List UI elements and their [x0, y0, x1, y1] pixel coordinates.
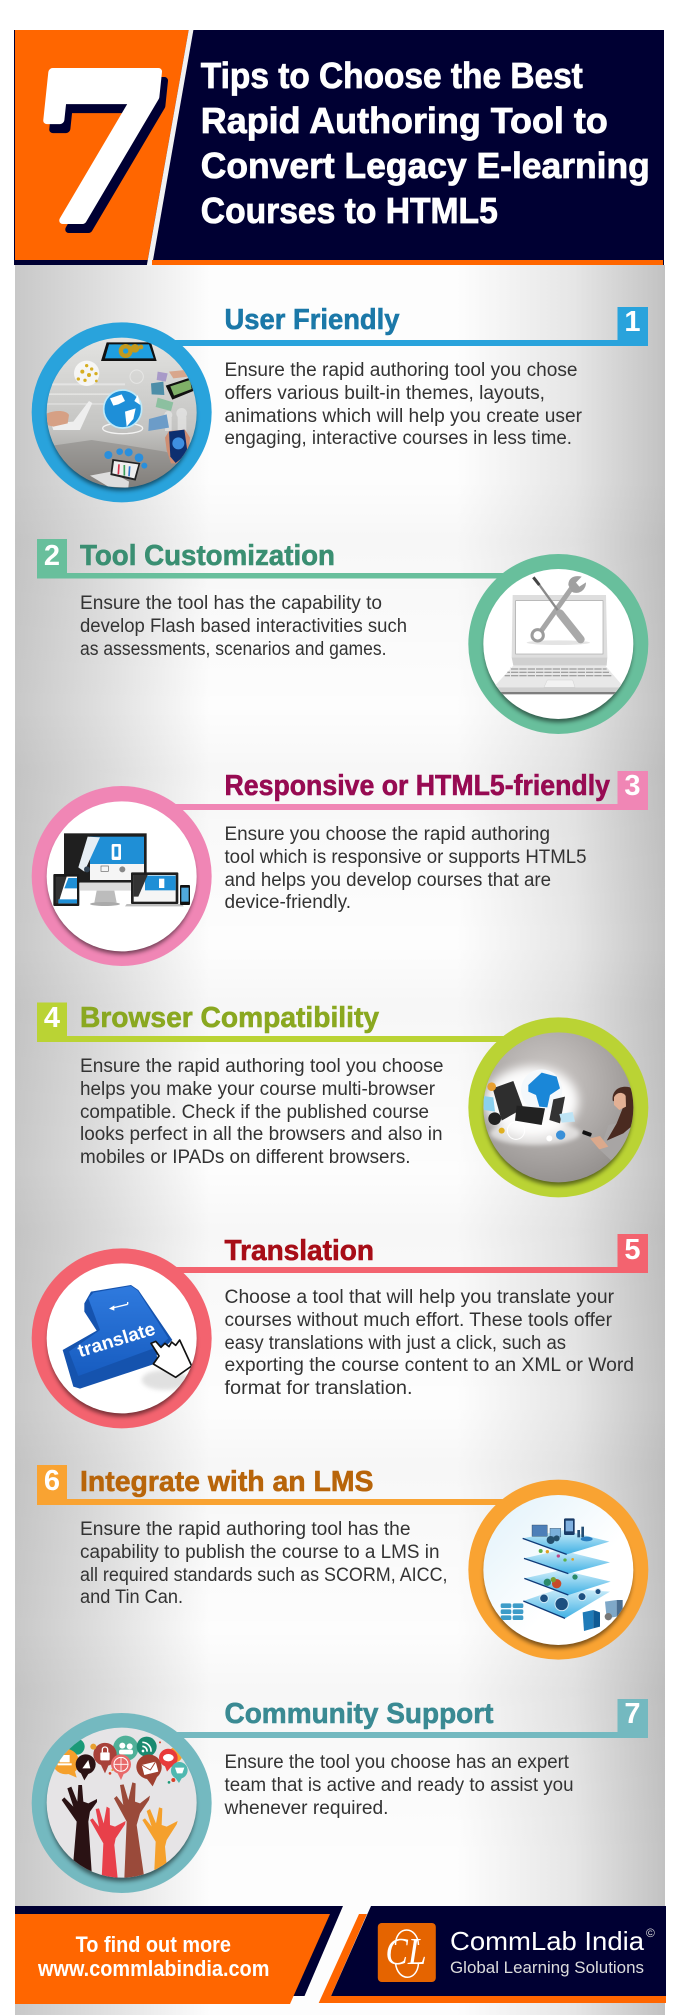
connector bar and number box [175, 1699, 648, 1738]
connector bar and number box [175, 307, 648, 346]
number 1: 1 [624, 306, 641, 338]
icon: translate key: translate [75, 1318, 158, 1361]
body text: device-friendly. [224, 892, 351, 913]
body text: tool which is responsive or supports HTML5 [224, 847, 586, 868]
body text: mobiles or IPADs on different browsers. [80, 1147, 410, 1168]
body text: and helps you develop courses that are [224, 870, 551, 891]
heading: Community Support [224, 1698, 494, 1730]
body text: looks perfect in all the browsers and also in [80, 1124, 442, 1145]
body text: Ensure the rapid authoring tool has the [80, 1519, 410, 1540]
footer call to action panel [15, 1914, 330, 2004]
footer [15, 1906, 666, 2004]
white slash [147, 30, 193, 266]
body text: whenever required. [223, 1798, 388, 1819]
body text [223, 1752, 573, 1819]
connector bar and number box [175, 771, 648, 810]
tagline: Global Learning Solutions [450, 1958, 644, 1977]
big number seven: 7 [22, 40, 185, 278]
connector bar and number box [37, 539, 510, 578]
number 7: 7 [624, 1698, 641, 1730]
body text: Ensure the rapid authoring tool you choose [80, 1056, 444, 1077]
footer call to action panel: www.commlabindia.com [37, 1956, 269, 1981]
number 5: 5 [624, 1234, 641, 1266]
body text: capability to publish the course to a LMS in [80, 1542, 440, 1563]
body text [80, 593, 407, 660]
body text: and Tin Can. [80, 1587, 183, 1608]
number 4: 4 [44, 1002, 60, 1034]
number 6: 6 [44, 1465, 60, 1497]
title: Tips to Choose the Best [201, 55, 583, 96]
body text: offers various built-in themes, layouts, [224, 383, 545, 404]
copyright mark: © [646, 1926, 655, 1940]
body text: easy translations with just a click, such as [224, 1333, 566, 1354]
icon: raised hands and speech bubbles [32, 1713, 212, 1893]
heading: Tool Customization [80, 540, 335, 572]
title: Rapid Authoring Tool to [201, 100, 608, 141]
title: Courses to HTML5 [201, 190, 498, 231]
body text [224, 360, 583, 449]
heading: Responsive or HTML5-friendly [224, 770, 610, 802]
body text: compatible. Check if the published course [80, 1102, 429, 1123]
body text: Ensure the tool has the capability to [80, 593, 382, 614]
body text: team that is active and ready to assist you [224, 1775, 574, 1796]
number 3: 3 [624, 770, 641, 802]
panel: tip 2 tool customization [37, 539, 648, 734]
logo mark [378, 1923, 436, 1982]
heading: User Friendly [224, 304, 400, 336]
icon: laptop with tools [468, 554, 648, 734]
icon: digital world collage [32, 322, 212, 502]
brand name: CommLab India [450, 1926, 645, 1956]
footer brand panel [319, 1906, 666, 2003]
panel: tip 7 community support [32, 1698, 648, 1893]
panel: tip 1 user friendly [32, 304, 648, 502]
body text: develop Flash based interactivities such [80, 616, 407, 637]
body text: Ensure the rapid authoring tool you chose [224, 360, 578, 381]
body text [80, 1056, 444, 1168]
body text: Choose a tool that will help you translate your [224, 1287, 615, 1308]
body text [224, 1287, 634, 1399]
panel: tip 3 responsive [32, 770, 648, 966]
connector bar and number box [37, 1002, 510, 1042]
heading: Translation [224, 1235, 374, 1267]
logo mark: CL [386, 1931, 426, 1973]
footer call to action panel: To find out more [76, 1932, 231, 1957]
body text: helps you make your course multi-browser [80, 1079, 436, 1100]
panel: tip 5 translation [32, 1234, 648, 1428]
big number seven: 7 [16, 31, 179, 269]
icon: translate key [32, 1248, 212, 1428]
body text: as assessments, scenarios and games. [80, 639, 386, 660]
connector bar and number box [175, 1234, 648, 1273]
heading: Integrate with an LMS [80, 1466, 374, 1498]
connector bar and number box [37, 1465, 510, 1505]
panel: tip 6 integrate with LMS [37, 1465, 648, 1660]
icon: layered LMS diagram [468, 1480, 648, 1660]
body text: exporting the course content to an XML or Word [224, 1355, 634, 1376]
number 2: 2 [44, 540, 60, 572]
body text: Ensure you choose the rapid authoring [224, 824, 550, 845]
icon: responsive devices [32, 786, 212, 966]
orange number panel [15, 30, 189, 260]
body text: format for translation. [224, 1378, 412, 1399]
body text: Ensure the tool you choose has an expert [224, 1752, 570, 1773]
body text [224, 824, 586, 913]
icon: woman with devices cloud [468, 1017, 648, 1197]
body text: engaging, interactive courses in less time. [224, 428, 572, 449]
body text: courses without much effort. These tools offer [224, 1310, 613, 1331]
orange underline [152, 260, 663, 265]
body text: all required standards such as SCORM, AICC, [80, 1565, 448, 1586]
footer left navy strip [15, 1906, 343, 1996]
title [201, 55, 650, 231]
header banner [14, 30, 664, 278]
title: Convert Legacy E-learning [201, 145, 650, 186]
panel: tip 4 browser compatibility [37, 1002, 648, 1197]
body text [80, 1519, 448, 1608]
body text: animations which will help you create user [224, 406, 583, 427]
heading: Browser Compatibility [80, 1002, 379, 1034]
